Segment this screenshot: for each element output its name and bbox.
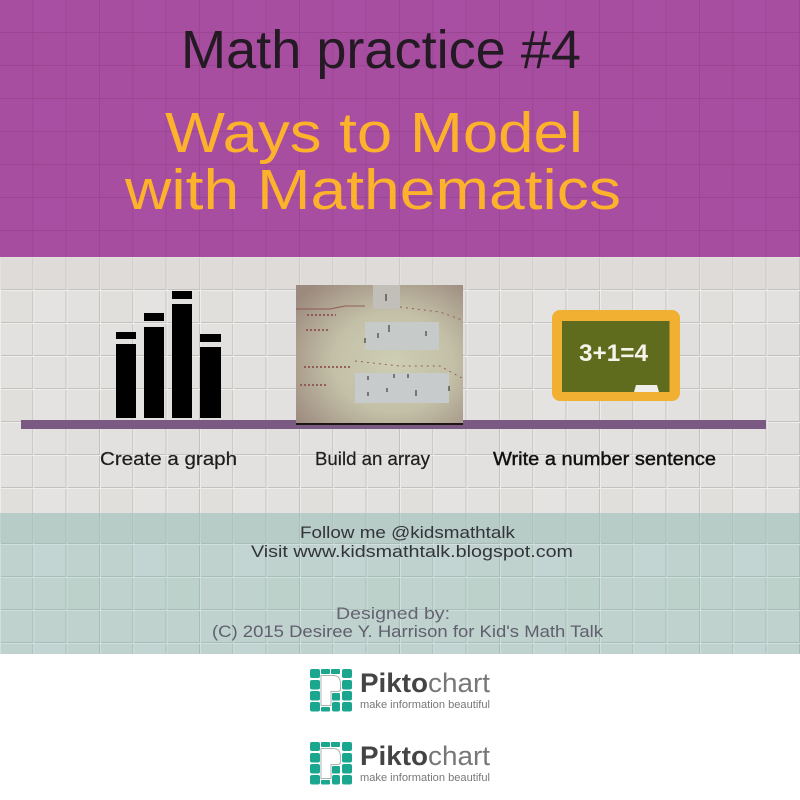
chalkboard equation: 3+1=4 [579, 340, 649, 367]
panel: teal credits [0, 513, 800, 654]
title: ways to model with mathematics [124, 101, 621, 222]
panel: purple header [0, 0, 800, 257]
text: designed by: Designed by: [336, 604, 450, 623]
label: build an array: Build an array [315, 449, 430, 469]
title: ways to model with mathematics: with Mathematics [124, 158, 621, 222]
title: ways to model with mathematics: Ways to Model [165, 101, 583, 165]
photo: paper array on whiteboard [296, 285, 463, 425]
shelf [21, 420, 766, 429]
text: copyright: (C) 2015 Desiree Y. Harrison for Kid's Math Talk [212, 622, 604, 641]
icon: bar graph [116, 291, 221, 418]
icon: chalkboard [552, 310, 680, 401]
label: write a number sentence: Write a number sentence [493, 449, 716, 469]
chalk eraser [634, 385, 659, 392]
logo: piktochart second [310, 741, 491, 784]
text: visit blog: Visit www.kidsmathtalk.blogspot.com [251, 542, 573, 561]
text: follow me: Follow me @kidsmathtalk [300, 523, 516, 542]
panel: shelf of models [0, 257, 800, 513]
label: create a graph: Create a graph [100, 449, 237, 469]
logo: piktochart first [310, 668, 491, 712]
heading: math practice: Math practice #4 [181, 20, 581, 80]
